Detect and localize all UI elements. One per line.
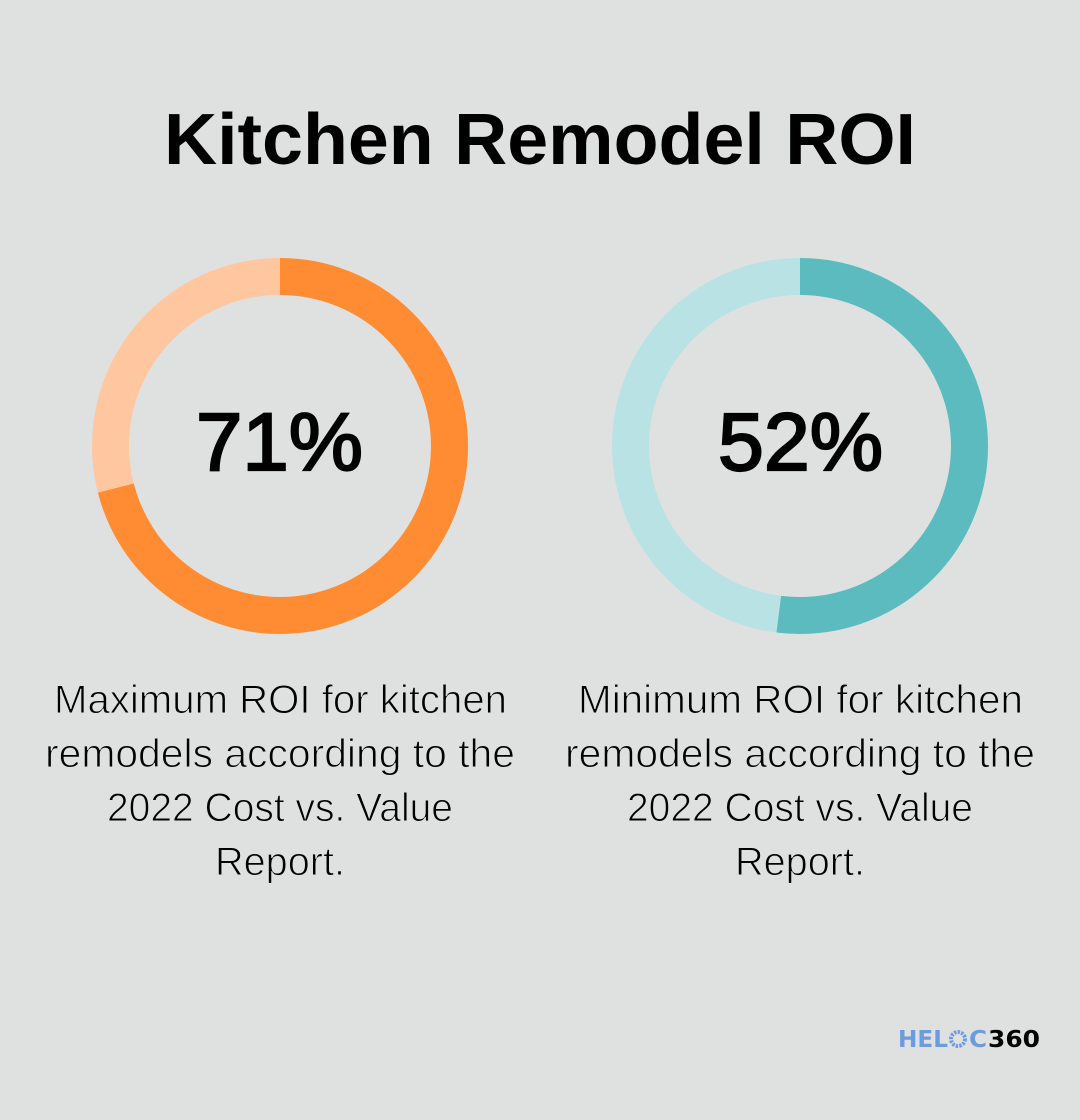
value: 52%: 52% [718,397,883,488]
logo: HELOC360 [898,1027,1040,1053]
description: minimum ROI: Report. [735,840,865,884]
description: maximum ROI: Report. [215,840,345,884]
panel: minimum ROI [565,276,1035,884]
description: minimum ROI: remodels according to the [565,732,1035,776]
description: maximum ROI [45,678,515,884]
description: maximum ROI: remodels according to the [45,732,515,776]
donut chart: 52% [630,276,970,616]
description: minimum ROI: 2022 Cost vs. Value [627,786,973,830]
title: Kitchen Remodel ROI [164,100,916,180]
logo: HELOC360: C [969,1027,987,1053]
icon: swirl letter O [951,1032,965,1046]
description: maximum ROI: 2022 Cost vs. Value [107,786,453,830]
description: minimum ROI: Minimum ROI for kitchen [578,678,1023,722]
panel: maximum ROI [45,276,515,884]
logo: HELOC360: 360 [988,1027,1040,1053]
donut chart: 71% [110,276,450,616]
description: minimum ROI [565,678,1035,884]
value: 71%: 71% [196,397,363,488]
description: maximum ROI: Maximum ROI for kitchen [54,678,507,722]
logo: HELOC360: HEL [898,1027,948,1053]
